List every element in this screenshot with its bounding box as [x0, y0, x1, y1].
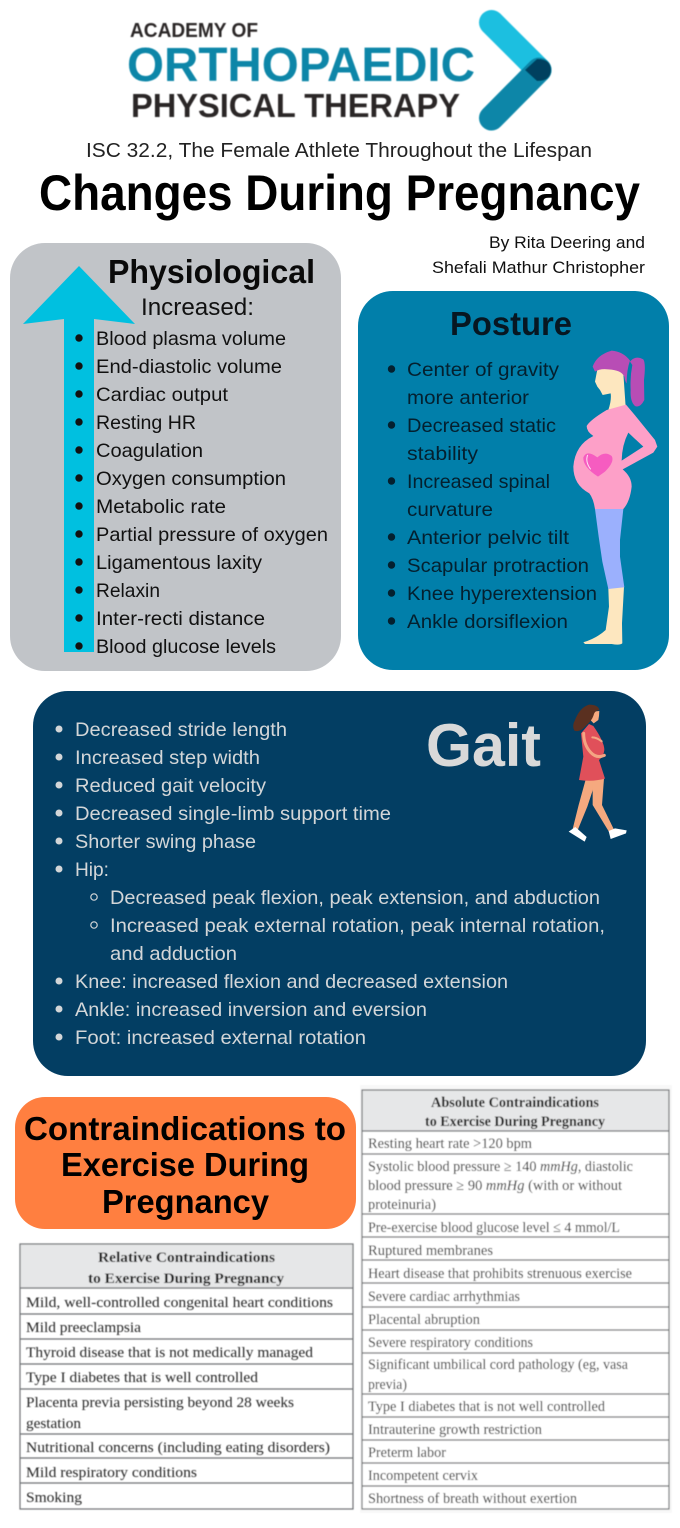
- panel background: [33, 691, 646, 1076]
- list: increased measures: Blood glucose levels: [96, 636, 276, 658]
- list: posture changes: Increased spinal: [407, 471, 550, 493]
- table rows: Incompetent cervix: [368, 1468, 479, 1484]
- table rows: Thyroid disease that is not medically managed: [26, 1345, 314, 1361]
- table backing: [360, 1085, 672, 1513]
- list: increased measures: End-diastolic volume: [96, 356, 282, 378]
- list: posture changes: [388, 359, 597, 633]
- list: gait changes: Decreased peak flexion, peak extension, and abduction: [110, 887, 600, 909]
- table header: to Exercise During Pregnancy: [88, 1271, 285, 1287]
- table rows: Pre-exercise blood glucose level ≤ 4 mmol/L: [368, 1220, 620, 1236]
- panel: posture: [358, 291, 669, 670]
- list: posture changes: Scapular protraction: [407, 555, 589, 577]
- list: gait changes: Shorter swing phase: [75, 831, 256, 853]
- table rows: Mild, well-controlled congenital heart conditions: [26, 1295, 333, 1311]
- table rows: Significant umbilical cord pathology (eg, vasa: [368, 1357, 629, 1373]
- list: gait changes: and adduction: [110, 943, 237, 965]
- list: posture changes: curvature: [407, 499, 493, 521]
- table header: [362, 1090, 669, 1131]
- table rows: Intrauterine growth restriction: [368, 1422, 543, 1438]
- title: Changes During Pregnancy: [39, 165, 640, 221]
- table header: to Exercise During Pregnancy: [425, 1114, 606, 1130]
- callout background: [15, 1097, 356, 1229]
- table: relative contraindications: [20, 1244, 353, 1509]
- heading: gait: Gait: [426, 712, 541, 779]
- panel background: [10, 243, 341, 671]
- list: posture changes: more anterior: [407, 387, 530, 409]
- authors: Shefali Mathur Christopher: [432, 258, 645, 277]
- icon: pregnant woman standing in profile: [573, 351, 657, 645]
- table rows: [26, 1295, 333, 1506]
- authors: By Rita Deering and: [489, 233, 645, 252]
- list: gait changes: Decreased single-limb support time: [75, 803, 391, 825]
- table rows: Smoking: [26, 1490, 82, 1506]
- list: gait changes: Increased peak external rotation, peak internal rotation,: [110, 915, 605, 937]
- list: gait changes: Foot: increased external rotation: [75, 1027, 366, 1049]
- list: increased measures: Inter-recti distance: [96, 608, 265, 630]
- callout text: [24, 1110, 346, 1220]
- list: posture changes: Knee hyperextension: [407, 583, 597, 605]
- table rows: Type I diabetes that is not well controlled: [368, 1399, 606, 1415]
- list: increased measures: Ligamentous laxity: [96, 552, 262, 574]
- list: posture changes: Ankle dorsiflexion: [407, 611, 568, 633]
- table rows: Placenta previa persisting beyond 28 weeks: [26, 1395, 294, 1411]
- table rows: Mild respiratory conditions: [26, 1465, 197, 1481]
- table rows: Placental abruption: [368, 1312, 481, 1328]
- callout text: Pregnancy: [102, 1183, 270, 1220]
- table rows: previa): [368, 1377, 407, 1393]
- logo wordmark: [127, 20, 475, 124]
- list: gait changes: Ankle: increased inversion and eversion: [75, 999, 427, 1021]
- list: gait changes: Knee: increased flexion and decreased extension: [75, 971, 508, 993]
- list: gait changes: Decreased stride length: [75, 719, 287, 741]
- table header: [20, 1244, 353, 1288]
- callout: contraindications heading: [15, 1097, 356, 1229]
- table rows: Mild preeclampsia: [26, 1320, 142, 1336]
- list: increased measures: Oxygen consumption: [96, 468, 286, 490]
- table rows: proteinuria): [368, 1197, 436, 1213]
- logo: Academy of Orthopaedic Physical Therapy: [127, 20, 551, 124]
- list: posture changes: Decreased static: [407, 415, 556, 437]
- table rows: Preterm labor: [368, 1445, 446, 1461]
- table rows: Severe respiratory conditions: [368, 1335, 533, 1351]
- list: increased measures: Relaxin: [96, 580, 160, 602]
- heading: physiological: Physiological: [108, 253, 315, 290]
- table: absolute contraindications: [360, 1085, 672, 1513]
- list: gait changes: Increased step width: [75, 747, 260, 769]
- callout text: Contraindications to: [24, 1110, 346, 1147]
- list: posture changes: Center of gravity: [407, 359, 559, 381]
- list: increased measures: Partial pressure of oxygen: [96, 524, 328, 546]
- list: increased measures: [75, 328, 328, 658]
- list: posture changes: Anterior pelvic tilt: [407, 527, 570, 549]
- authors: [432, 233, 645, 277]
- table rows: Type I diabetes that is well controlled: [26, 1370, 259, 1386]
- list: increased measures: Resting HR: [96, 412, 196, 434]
- icon: up arrow: [23, 266, 135, 652]
- table rows: Severe cardiac arrhythmias: [368, 1289, 520, 1305]
- logo wordmark: ACADEMY OF: [130, 20, 258, 42]
- table header: Relative Contraindications: [98, 1250, 275, 1266]
- logo wordmark: ORTHOPAEDIC: [127, 39, 475, 92]
- list: increased measures: Cardiac output: [96, 384, 229, 406]
- icon: pregnant woman walking: [569, 705, 627, 842]
- panel background: [358, 291, 669, 670]
- table rows: Ruptured membranes: [368, 1243, 493, 1259]
- table rows: Nutritional concerns (including eating disorders): [26, 1440, 330, 1456]
- list: posture changes: stability: [407, 443, 478, 465]
- logo wordmark: PHYSICAL THERAPY: [131, 87, 460, 124]
- list: increased measures: Metabolic rate: [96, 496, 226, 518]
- subheading: increased: Increased:: [141, 294, 254, 321]
- callout text: Exercise During: [61, 1146, 309, 1183]
- table rows: [368, 1136, 633, 1507]
- table rows: Systolic blood pressure ≥ 140 mmHg, diastolic: [368, 1159, 633, 1175]
- list: gait changes: [56, 719, 605, 1049]
- logo chevron: [492, 22, 551, 118]
- table rows: blood pressure ≥ 90 mmHg (with or without: [368, 1178, 622, 1194]
- list: increased measures: Coagulation: [96, 440, 203, 462]
- list: gait changes: Hip:: [75, 859, 109, 881]
- table rows: Resting heart rate >120 bpm: [368, 1136, 533, 1152]
- table rows: gestation: [26, 1416, 82, 1432]
- subtitle: ISC 32.2, The Female Athlete Throughout the Lifespan: [86, 140, 592, 162]
- table header: Absolute Contraindications: [431, 1095, 599, 1111]
- table rows: Shortness of breath without exertion: [368, 1491, 578, 1507]
- heading: posture: Posture: [450, 305, 572, 342]
- panel: gait: [33, 691, 646, 1076]
- table rows: Heart disease that prohibits strenuous exercise: [368, 1266, 632, 1282]
- list: gait changes: Reduced gait velocity: [75, 775, 266, 797]
- panel: physiological: [10, 243, 341, 671]
- list: increased measures: Blood plasma volume: [96, 328, 286, 350]
